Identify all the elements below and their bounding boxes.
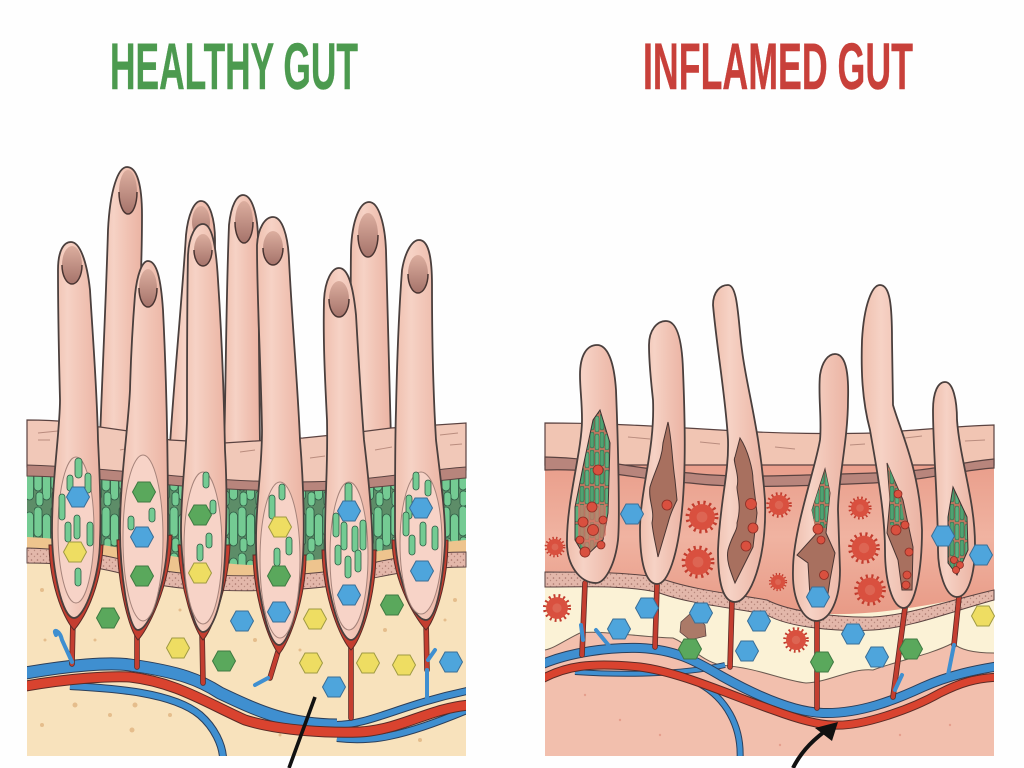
speckles <box>584 694 951 746</box>
epithelium top layer <box>545 423 994 465</box>
epithelium top layer <box>27 420 466 482</box>
speckles <box>40 588 457 742</box>
cream layer <box>545 585 994 683</box>
villi stems <box>55 620 435 718</box>
lower pink tissue <box>545 590 994 756</box>
leak patch <box>680 612 706 640</box>
villus 5 <box>862 285 922 608</box>
villus 2 <box>117 261 172 640</box>
arrow: healthy gut pointer <box>289 697 315 768</box>
villus 1 <box>49 242 103 630</box>
villus 1 <box>567 345 619 583</box>
arrow: inflamed gut pointer <box>793 722 838 768</box>
submucosa tan layer <box>27 540 466 756</box>
mauve band <box>27 465 466 491</box>
pathogens <box>545 494 884 651</box>
free particles <box>608 504 994 672</box>
villus 3 <box>178 224 230 640</box>
villus 6 <box>933 382 975 597</box>
blood vessels <box>540 648 1000 760</box>
free particles <box>96 595 462 697</box>
villus 6 <box>392 240 448 630</box>
tan strip <box>27 537 466 582</box>
panel: inflamed gut illustration <box>540 285 1000 760</box>
inflamed lamina <box>545 460 994 614</box>
mauve band <box>545 457 994 486</box>
mucosa bacteria band <box>27 467 466 576</box>
villi stems <box>581 583 959 708</box>
back row of villi <box>100 167 391 450</box>
panel: healthy gut illustration <box>20 167 470 757</box>
villus 5 <box>322 268 376 650</box>
stippled membrane <box>545 572 994 630</box>
villus 4 <box>793 354 848 621</box>
villus 2 <box>640 321 685 584</box>
blood vessels <box>20 664 470 757</box>
villus 4 <box>253 217 306 654</box>
title: healthy gut: HEALTHY GUT <box>110 29 358 103</box>
stippled basement membrane <box>27 548 466 591</box>
villus 3 <box>713 285 765 602</box>
